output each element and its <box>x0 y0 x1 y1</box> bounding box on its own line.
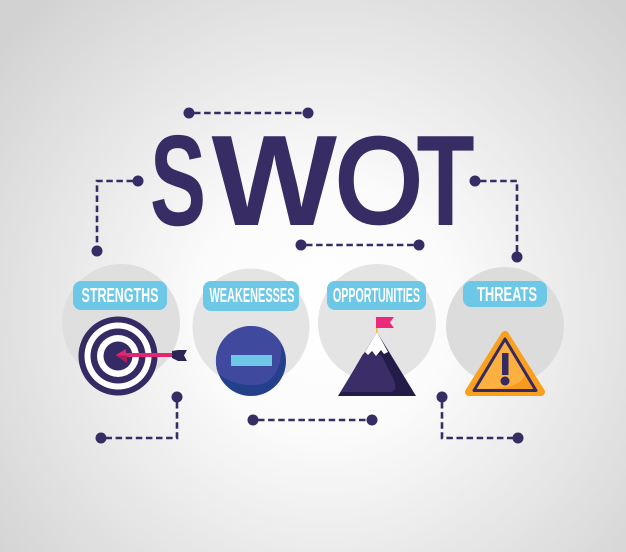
connector: lower middle <box>248 414 378 426</box>
label: strengths: STRENGTHS <box>82 285 158 307</box>
connector: lower left <box>96 392 182 444</box>
label: weakenesses: WEAKENESSES <box>210 285 294 307</box>
connector: upper left <box>92 176 144 256</box>
panel: strengths <box>62 264 187 396</box>
label: threats: THREATS <box>477 284 537 306</box>
connector: upper right <box>470 176 522 262</box>
panel: weaknesses <box>192 268 310 396</box>
connector: top <box>184 108 314 118</box>
icon: warning triangle <box>469 335 541 392</box>
connector: lower right <box>436 392 524 444</box>
title: SWOT: O <box>336 114 422 248</box>
title: SWOT <box>150 108 475 253</box>
title: SWOT: S <box>150 109 206 253</box>
backdrop circle: weaknesses <box>192 268 310 386</box>
title: SWOT: W <box>212 108 337 253</box>
icon: mountain with flag <box>338 317 416 396</box>
backdrop circle: strengths <box>62 264 180 382</box>
panel: threats <box>446 267 564 392</box>
icon: target with arrow <box>78 316 187 396</box>
icon: minus circle <box>216 326 286 396</box>
label: opportunities: OPPORTUNITIES <box>333 285 420 307</box>
panel: opportunities <box>318 264 436 396</box>
backdrop circle: threats <box>446 267 564 385</box>
title: SWOT: T <box>416 109 475 253</box>
backdrop circle: opportunities <box>318 264 436 382</box>
connector: under title <box>296 240 424 250</box>
